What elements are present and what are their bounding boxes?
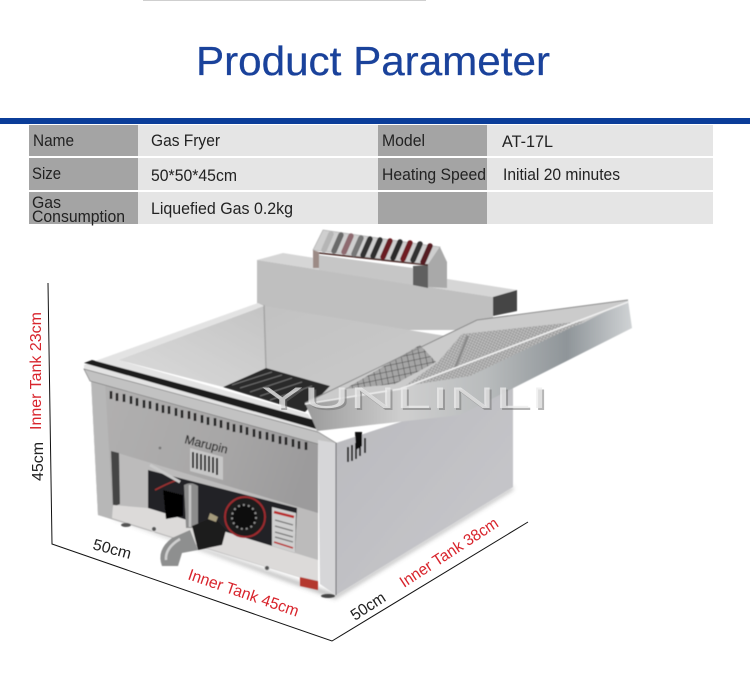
row: size and heating speed [32,164,620,185]
red sticker [300,577,318,590]
fry basket [305,300,632,431]
front panel [91,378,318,583]
tank interior back wall [264,306,470,400]
control panel [148,470,297,553]
corner seam [264,305,266,368]
warning label [272,507,296,553]
top edge image remnant [143,0,426,1]
lower strip [112,505,318,583]
row: gas consumption: Gas [32,193,61,212]
outer shell [305,300,632,431]
row: size and heating speed: Size [32,164,61,183]
left pillar [91,378,113,519]
header divider bar [0,118,750,124]
side vents [348,432,365,462]
watermark: YUNLINLI [261,382,548,415]
row: name and model [33,131,553,151]
row backgrounds [29,125,713,224]
screws [151,447,270,571]
ignition block [150,465,183,519]
label: outer depth: 50cm [348,589,389,624]
row: name and model: AT-17L [502,132,553,151]
dimension lines [48,283,528,641]
feet [121,523,335,598]
row: size and heating speed: Heating Speed [382,165,486,184]
floor shadow [110,486,513,599]
label: inner tank height: Inner Tank 23cm [28,312,45,430]
hanger slots [324,234,430,262]
row: name and model: Gas Fryer [151,131,220,150]
watermark [261,382,550,417]
lower recess [111,451,318,583]
temperature dial [225,497,265,537]
front lip under rim [84,369,336,444]
row: name and model: Name [33,131,74,150]
corner strip [318,440,336,595]
gas fryer product photo [84,230,632,599]
label: outer width: 50cm [91,536,133,563]
row: gas consumption: Liquefied Gas 0.2kg [151,199,293,218]
row: gas consumption [32,193,293,226]
tank interior left wall [118,306,266,387]
watermark: YUNLINLI [263,384,550,417]
label: inner tank width: Inner Tank 45cm [186,567,301,621]
gas valve and faucet [160,483,226,566]
label: outer height: 45cm [30,442,47,481]
right side panel [336,385,513,595]
parameter table [29,125,713,226]
label: inner tank depth: Inner Tank 38cm [397,515,502,591]
fine mesh [405,321,585,386]
basket hanger [313,230,447,288]
row: size and heating speed: 50*50*45cm [151,166,237,185]
back riser [257,253,517,330]
center vent plate [190,448,223,480]
top vent slots row [111,391,306,450]
row: gas consumption: Consumption [32,207,125,226]
burner grate [223,368,330,412]
title: Product Parameter [196,38,550,84]
rim black band [84,360,318,429]
coarse mesh [345,345,436,389]
row: size and heating speed: Initial 20 minutes [503,165,620,184]
top rim [84,303,318,432]
brand logo: Marupin [183,432,229,457]
row: name and model: Model [382,131,425,150]
front rim highlight [305,302,628,404]
inner back wall [305,300,628,403]
